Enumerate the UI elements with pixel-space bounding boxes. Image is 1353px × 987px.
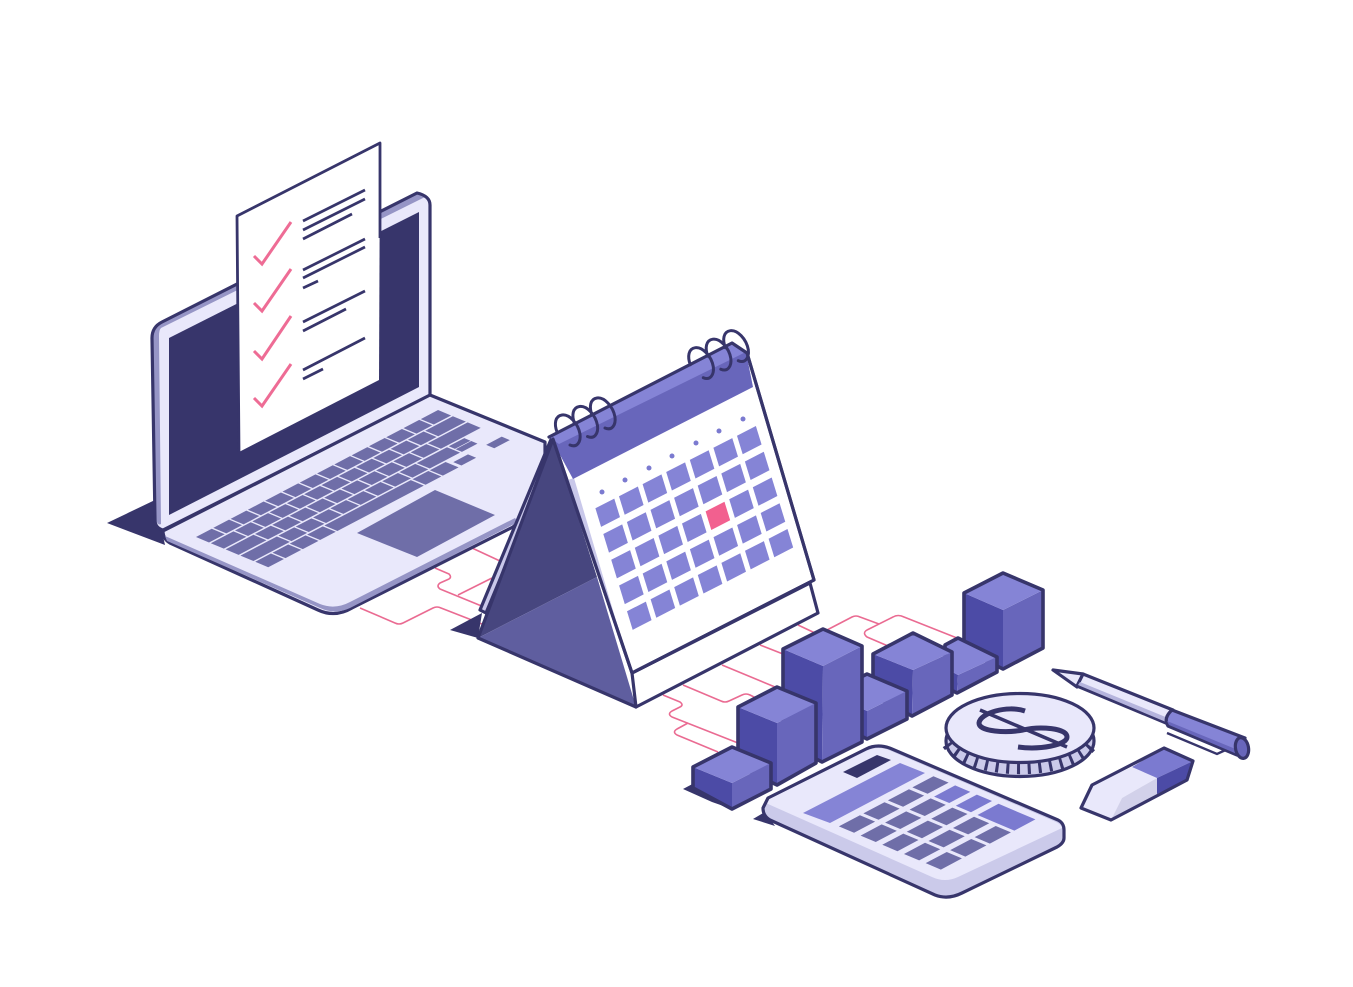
coin edge (946, 706, 1094, 776)
pen tip (1053, 670, 1083, 687)
eraser (1081, 748, 1193, 820)
3D bar chart (683, 573, 1043, 809)
calculator solar panel (843, 755, 891, 778)
calculator (753, 746, 1064, 897)
keyboard (196, 410, 510, 567)
laptop screen (169, 212, 419, 515)
bar 7 (964, 573, 1043, 669)
pen (1053, 670, 1250, 759)
checkmarks (254, 222, 291, 406)
desk calendar (450, 331, 818, 707)
pen body (1077, 674, 1173, 723)
bar 2 (738, 687, 816, 785)
laptop (107, 193, 545, 614)
bar 5 (873, 633, 952, 716)
bar 6 (945, 638, 997, 693)
calculator display (803, 763, 925, 823)
pen grip (1166, 710, 1245, 755)
pink circuit lines (360, 548, 957, 752)
dollar sign (979, 709, 1067, 748)
calendar lower page (632, 583, 818, 707)
calendar header (552, 352, 753, 479)
pen cap (1234, 737, 1250, 759)
checklist paper (237, 143, 380, 452)
calculator shadow (753, 812, 775, 826)
calculator body (763, 746, 1064, 897)
calendar weekday dots (600, 416, 746, 494)
coin face (946, 694, 1094, 762)
calendar date grid (595, 426, 793, 630)
calendar stand side (478, 439, 636, 707)
paper text lines (303, 190, 365, 379)
touchpad (357, 490, 495, 557)
calendar back page (480, 437, 556, 613)
calendar front page (553, 353, 814, 673)
bar 1 (693, 747, 771, 809)
laptop base (163, 395, 545, 614)
chart shadow (683, 780, 732, 809)
calculator top face (767, 748, 1062, 880)
calculator keys (839, 776, 1035, 870)
dollar coin (946, 694, 1094, 776)
laptop lid (152, 193, 430, 530)
pen shadow line (1167, 733, 1230, 754)
bar 4 (855, 674, 907, 739)
bar 3 (783, 629, 862, 762)
calendar shadow (450, 613, 482, 638)
laptop shadow (107, 500, 165, 545)
calendar spiral rings (555, 331, 748, 446)
